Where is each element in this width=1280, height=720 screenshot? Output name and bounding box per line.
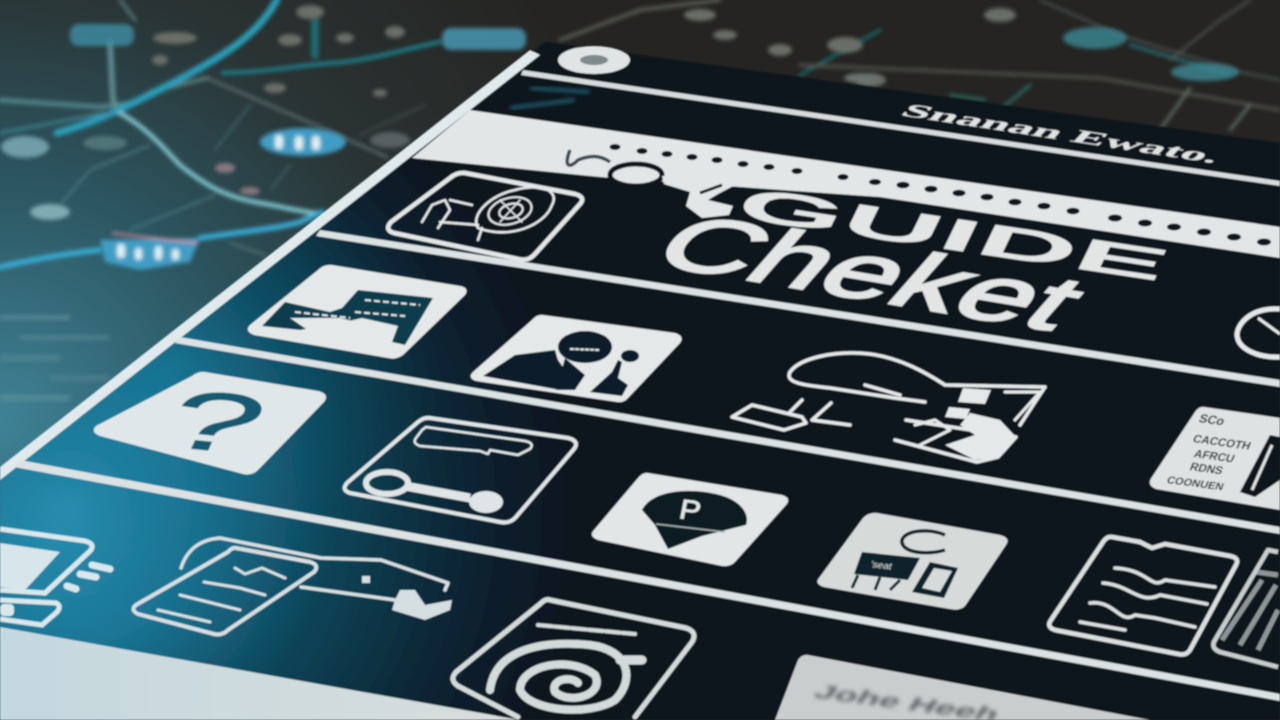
icon: document card: CACCOTH — [1191, 434, 1252, 453]
header rule — [521, 70, 1280, 186]
icon: person at desk — [471, 315, 682, 402]
icon: laptop and text card — [248, 265, 467, 359]
icon: portrait sketch — [388, 173, 582, 260]
icon: circle at right edge — [1237, 309, 1280, 357]
icon: open book outline — [1049, 537, 1237, 654]
icon: striped panel at right edge — [1213, 550, 1278, 667]
map signs — [0, 5, 1239, 401]
icon: car outline — [732, 353, 1045, 462]
icon: P marker card — [592, 473, 788, 566]
icon: C sign card: 'seat — [869, 560, 894, 572]
icon: P marker card: P — [677, 494, 703, 527]
header text: Snanan Ewato. — [895, 100, 1228, 167]
icon: laptop — [0, 529, 110, 625]
icon: document card — [1150, 407, 1280, 510]
panel: bottom white band — [0, 627, 520, 720]
icon: document and wrench — [133, 538, 452, 634]
icon: spiral hose — [453, 600, 694, 717]
icon: question mark card: ? — [150, 373, 280, 471]
title: GUIDE: GUIDE — [727, 178, 1179, 290]
icon: document card: AFRCU — [1192, 449, 1236, 465]
icon: C sign card — [817, 513, 1008, 610]
sheet left edge — [0, 50, 540, 480]
icon: document card: RDNS — [1188, 462, 1225, 477]
title: Cheket: Cheket — [634, 199, 1107, 345]
icon: document card: SCo — [1197, 412, 1227, 428]
panel: bottom text card — [775, 655, 1150, 720]
top badge — [558, 46, 630, 74]
dotted title band — [412, 110, 1280, 258]
faint header scribble — [510, 88, 590, 108]
icon: document card: COONUEN — [1165, 475, 1226, 493]
row rules — [14, 230, 1280, 701]
decorative squiggle with loop — [567, 150, 737, 218]
icon: question mark card — [94, 372, 326, 474]
icon: key and speech bubble outline — [345, 418, 576, 522]
